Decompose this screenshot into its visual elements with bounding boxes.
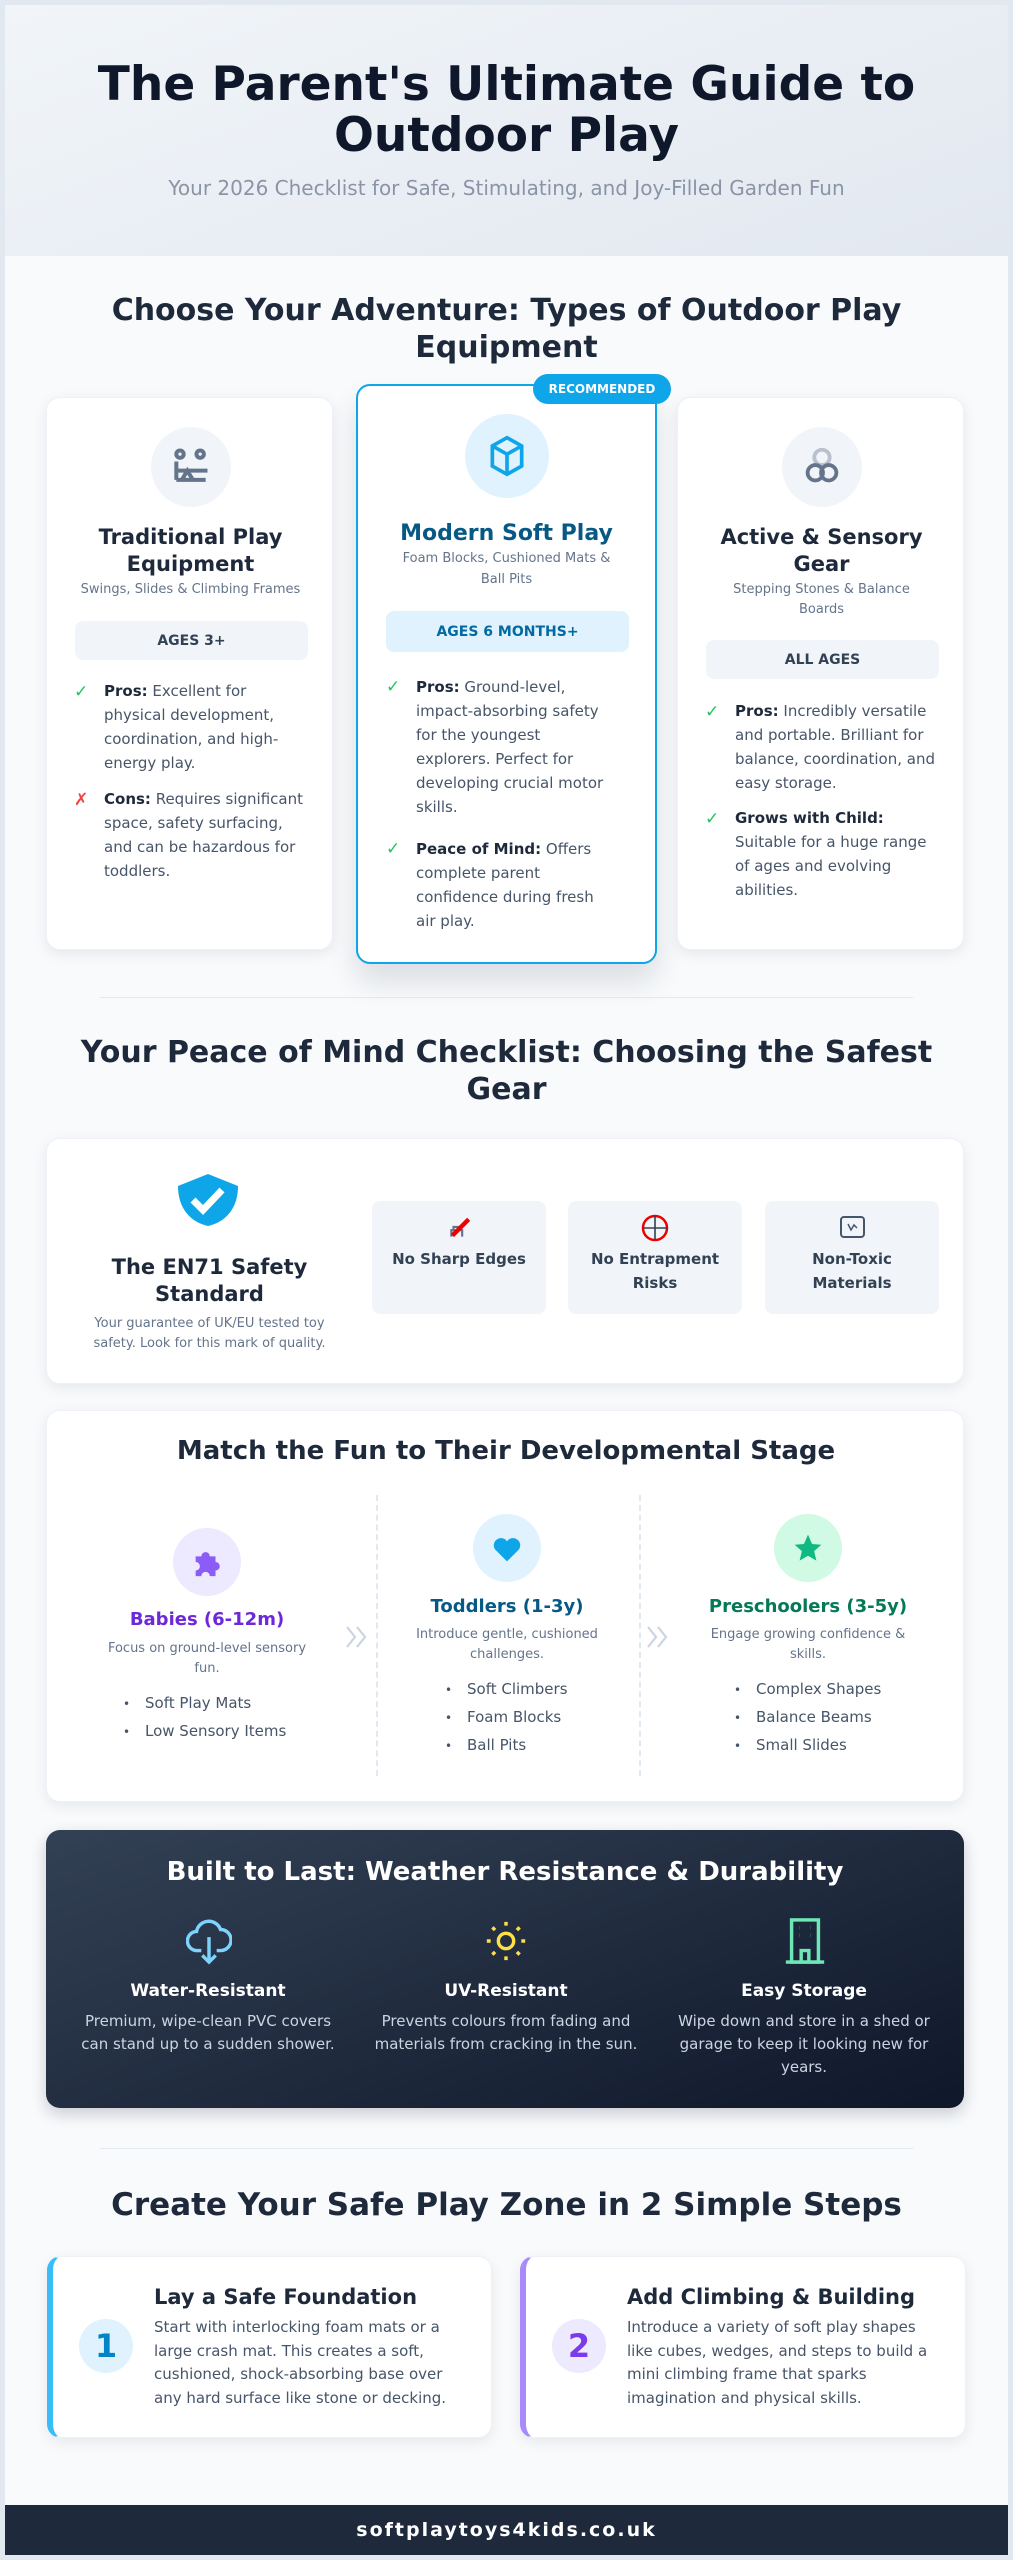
icon: shield xyxy=(178,1174,238,1226)
title: Outdoor Play xyxy=(334,108,679,163)
age pill: ALL AGES xyxy=(785,652,860,668)
pros xyxy=(74,682,278,772)
step title: Add Climbing & Building xyxy=(627,2285,915,2309)
stage: preschoolers: Small Slides xyxy=(756,1736,847,1754)
icon: seesaw xyxy=(151,427,231,507)
heading: types of equipment: Equipment xyxy=(415,330,598,365)
panel: weather resistance xyxy=(46,1830,964,2108)
card title: Gear xyxy=(793,552,850,576)
badge: recommended xyxy=(533,374,671,404)
number 2: 2 xyxy=(568,2327,590,2365)
stage: babies: Focus on ground-level sensory fun. xyxy=(108,1641,306,1676)
feature: uv-resistant: UV-Resistant xyxy=(444,1981,568,2001)
panel: modern soft play card: Pros: Ground-level, impact-absorbing safety for the youngest explorers. Perfect for developing crucial motor skills. xyxy=(416,678,603,816)
box: non-toxic: Materials xyxy=(812,1274,892,1292)
heading: safety checklist xyxy=(80,1035,932,1107)
age pill xyxy=(386,611,629,652)
stage heading: Match the Fun to Their Developmental Stage xyxy=(177,1436,835,1466)
heading: types of equipment xyxy=(112,293,901,365)
panel: active & sensory card: Grows with Child: Suitable for a huge range of ages and evolving abilities. xyxy=(735,809,926,899)
panel: modern soft play card: Peace of Mind: Offers complete parent confidence during fresh air play. xyxy=(416,840,594,930)
card title: Modern Soft Play xyxy=(400,521,613,546)
heading: safety checklist: Your Peace of Mind Checklist: Choosing the Safest xyxy=(81,1035,932,1070)
header band xyxy=(5,5,1008,256)
step title: Lay a Safe Foundation xyxy=(154,2285,417,2309)
feature: uv-resistant xyxy=(375,1922,637,2053)
stage: babies: Low Sensory Items xyxy=(145,1722,286,1740)
heading: types of equipment: Choose Your Adventure: Types of Outdoor Play xyxy=(112,293,901,328)
panel: traditional play card: Cons: Requires significant space, safety surfacing, and can be hazardous for toddlers. xyxy=(104,790,303,880)
card subtitle: Stepping Stones & Balance Boards xyxy=(733,582,910,617)
feature: water-resistant: Premium, wipe-clean PVC covers can stand up to a sudden shower. xyxy=(81,2012,335,2053)
panel: traditional play card: ✗ xyxy=(74,790,88,810)
footer xyxy=(5,2505,1008,2555)
card title: Traditional Play xyxy=(99,525,282,549)
step 2 card xyxy=(520,2256,966,2438)
stage: toddlers: Ball Pits xyxy=(467,1736,526,1754)
card subtitle: Swings, Slides & Climbing Frames xyxy=(81,582,300,597)
feature: uv-resistant: Prevents colours from fading and materials from cracking in the sun. xyxy=(375,2012,637,2053)
card title: Active & Sensory xyxy=(720,525,923,549)
arrow chevrons xyxy=(346,1626,366,1648)
step text: Start with interlocking foam mats or a large crash mat. This creates a soft, cushioned, shock-absorbing base over any hard surface like stone or decking. xyxy=(154,2318,446,2406)
box: no sharp edges: No Sharp Edges xyxy=(392,1250,526,1268)
stage: preschoolers: Complex Shapes xyxy=(756,1680,881,1698)
panel: traditional play card xyxy=(46,397,333,950)
stage: toddlers: Toddlers (1-3y) xyxy=(431,1596,583,1617)
stage: preschoolers: Balance Beams xyxy=(756,1708,872,1726)
stage: preschoolers: Preschoolers (3-5y) xyxy=(709,1596,907,1617)
icon: star xyxy=(774,1514,842,1582)
age pill: AGES 6 MONTHS+ xyxy=(436,624,579,640)
stage: babies: Babies (6-12m) xyxy=(130,1609,284,1630)
panel: developmental stages xyxy=(46,1410,964,1802)
card title xyxy=(98,525,282,576)
cons xyxy=(74,790,303,880)
stage: toddlers: Soft Climbers xyxy=(467,1680,568,1698)
icon: cube xyxy=(465,414,549,498)
arrow chevrons xyxy=(647,1626,668,1648)
card subtitle: Foam Blocks, Cushioned Mats & Ball Pits xyxy=(403,551,610,587)
box: no entrapment: Risks xyxy=(633,1274,677,1292)
feature: easy storage: Wipe down and store in a shed or garage to keep it looking new for years. xyxy=(678,2012,930,2076)
pros xyxy=(705,702,935,792)
icon: rings xyxy=(782,427,862,507)
number 2 xyxy=(552,2319,606,2373)
heading: steps: Create Your Safe Play Zone in 2 Simple Steps xyxy=(111,2187,902,2223)
title: The Parent's Ultimate Guide to xyxy=(98,57,915,112)
heading: safety checklist: Gear xyxy=(466,1072,546,1107)
panel: modern soft play card: ✓ xyxy=(386,839,400,859)
box: non-toxic xyxy=(765,1201,939,1314)
card title xyxy=(720,525,923,576)
pros xyxy=(386,677,604,816)
stage: preschoolers xyxy=(709,1514,907,1754)
number 1: 1 xyxy=(95,2327,117,2365)
title xyxy=(98,57,915,163)
feature: easy storage xyxy=(678,1918,930,2076)
panel: EN71 xyxy=(46,1138,964,1384)
EN71 description: Your guarantee of UK/EU tested toy safety. Look for this mark of quality. xyxy=(93,1316,326,1351)
stage: babies: Soft Play Mats xyxy=(145,1694,251,1712)
box: no entrapment xyxy=(568,1201,742,1314)
footer: softplaytoys4kids.co.uk xyxy=(356,2519,657,2541)
number 1 xyxy=(79,2319,133,2373)
stage: toddlers: Foam Blocks xyxy=(467,1708,561,1726)
peace of mind xyxy=(386,839,594,930)
panel: traditional play card: ✓ xyxy=(74,682,88,702)
feature: water-resistant: Water-Resistant xyxy=(130,1981,286,2001)
stage: preschoolers: Engage growing confidence & skills. xyxy=(711,1627,905,1662)
feature: water-resistant xyxy=(81,1920,335,2053)
step 1 card xyxy=(47,2256,492,2438)
stage: toddlers: Introduce gentle, cushioned challenges. xyxy=(416,1627,598,1662)
panel: active & sensory card: Pros: Incredibly versatile and portable. Brilliant for balance, coordination, and easy storage. xyxy=(735,702,935,792)
panel: modern soft play card: ✓ xyxy=(386,677,400,697)
panel: active & sensory card: ✓ xyxy=(705,809,719,829)
panel: traditional play card: Pros: Excellent for physical development, coordination, and high-energy play. xyxy=(104,682,278,772)
stage: toddlers xyxy=(416,1514,598,1754)
card title: Equipment xyxy=(127,552,254,576)
age pill xyxy=(75,621,308,660)
heading: Built to Last: Weather Resistance & Durability xyxy=(167,1857,843,1887)
box: no sharp edges xyxy=(372,1201,546,1314)
icon: puzzle xyxy=(173,1528,241,1596)
age pill xyxy=(706,640,939,679)
badge: recommended: RECOMMENDED xyxy=(549,382,655,396)
stage: babies xyxy=(108,1528,306,1740)
panel: active & sensory card: ✓ xyxy=(705,702,719,722)
box: no entrapment: No Entrapment xyxy=(591,1250,719,1268)
box: non-toxic: Non-Toxic xyxy=(812,1250,892,1268)
EN71 title: Standard xyxy=(155,1282,264,1306)
EN71 title: The EN71 Safety xyxy=(112,1255,307,1279)
panel: active & sensory card xyxy=(677,397,964,950)
grows with child xyxy=(705,809,926,899)
icon: heart xyxy=(473,1514,541,1582)
subtitle: Your 2026 Checklist for Safe, Stimulating, and Joy-Filled Garden Fun xyxy=(168,176,845,200)
EN71 title xyxy=(112,1255,307,1306)
age pill: AGES 3+ xyxy=(157,632,226,648)
panel: modern soft play card xyxy=(356,384,657,964)
step text: Introduce a variety of soft play shapes like cubes, wedges, and steps to build a mini climbing frame that sparks imagination and physical skills. xyxy=(627,2318,927,2406)
feature: easy storage: Easy Storage xyxy=(741,1981,867,2001)
